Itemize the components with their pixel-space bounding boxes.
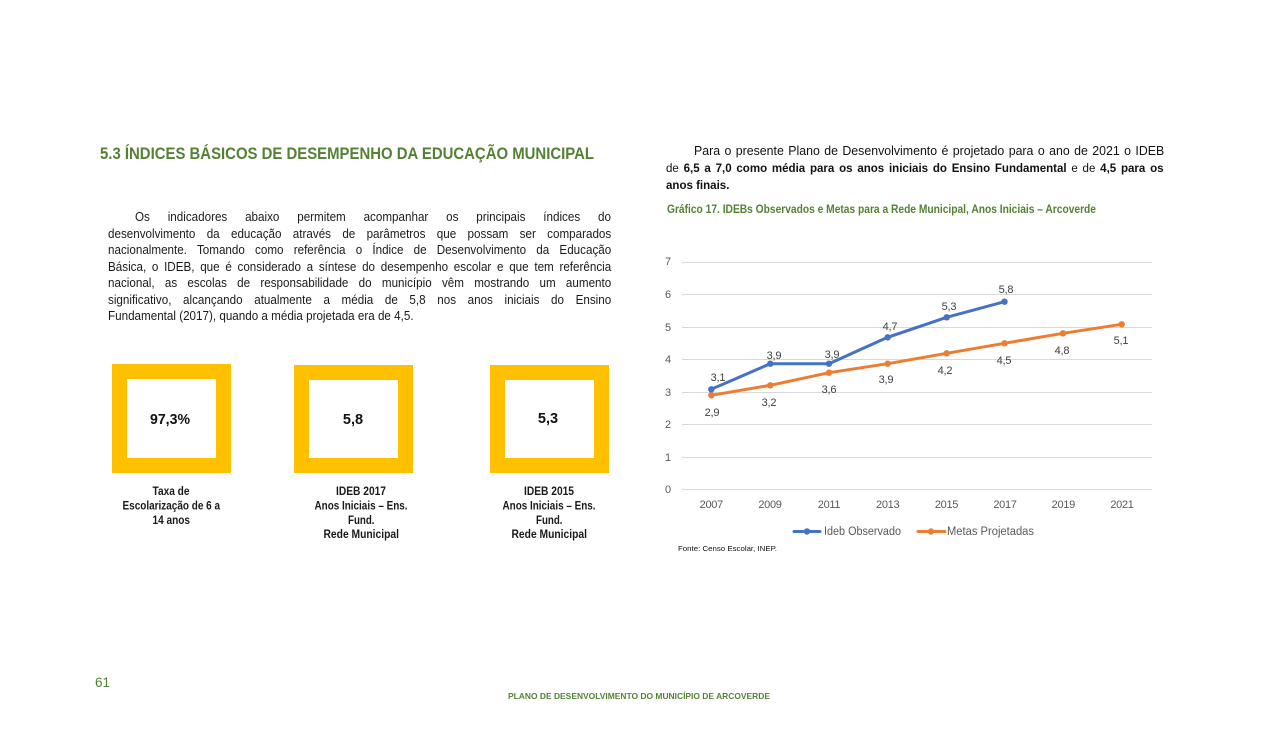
- yellow frame 2: [294, 365, 413, 473]
- caption: IDEB 2015: Rede Municipal: [512, 529, 587, 541]
- y axis labels: 6: [665, 289, 671, 301]
- data labels: ideb observado: 5,8: [999, 284, 1013, 296]
- series: metas projetadas: [708, 321, 1125, 398]
- data labels: metas projetadas: 4,5: [997, 355, 1011, 367]
- data labels: ideb observado: 3,1: [711, 372, 725, 384]
- caption: IDEB 2017: Anos Iniciais – Ens.: [314, 500, 408, 512]
- value 5,3: 5,3: [538, 411, 558, 427]
- panel: indicator IDEB 2017: [294, 365, 413, 541]
- y axis labels: 1: [665, 452, 671, 464]
- y axis labels: 4: [665, 354, 671, 366]
- y axis labels: [665, 256, 671, 496]
- data labels: ideb observado: [711, 284, 1013, 384]
- yellow frame 1: [112, 364, 231, 473]
- y axis labels: 5: [665, 322, 671, 334]
- caption: taxa de escolarização: Escolarização de 6 a: [122, 500, 221, 512]
- panel: indicator IDEB 2015: [490, 365, 609, 541]
- x axis labels: 2015: [935, 499, 958, 511]
- x axis labels: 2011: [818, 499, 840, 511]
- legend: Metas Projetadas: [947, 526, 1034, 538]
- data labels: ideb observado: 3,9: [767, 350, 781, 362]
- x axis labels: 2019: [1052, 499, 1075, 511]
- title: section heading: 5.3 ÍNDICES BÁSICOS DE DESEMPENHO DA EDUCAÇÃO MUNICIPAL: [100, 143, 594, 163]
- caption: IDEB 2015: IDEB 2015: [524, 486, 575, 498]
- y axis labels: 7: [665, 256, 671, 268]
- text block: introductory paragraph: Fundamental (2017), quando a média projetada era de 4,5.: [108, 308, 414, 323]
- caption: IDEB 2017: Fund.: [348, 515, 374, 527]
- caption: taxa de escolarização: [122, 486, 221, 527]
- line chart: Ideb observado e metas projetadas: [665, 256, 1152, 538]
- text block: introductory paragraph: [108, 209, 612, 323]
- data labels: metas projetadas: 5,1: [1114, 335, 1128, 347]
- caption: IDEB 2017: Rede Municipal: [324, 529, 399, 541]
- value 97,3%: 97,3%: [150, 412, 190, 428]
- panel: indicator 97,3%: [112, 364, 231, 527]
- caption: IDEB 2015: [502, 486, 596, 541]
- data labels: ideb observado: 5,3: [942, 301, 956, 313]
- data labels: metas projetadas: 3,9: [879, 374, 893, 386]
- x axis labels: 2017: [993, 499, 1017, 511]
- text block: introductory paragraph: nacionalmente. Tomando como referência o Índice de Desenvolvimento da Educação: [108, 242, 611, 257]
- yellow frame 3: [490, 365, 609, 473]
- data labels: metas projetadas: 4,8: [1055, 345, 1069, 357]
- legend: [794, 526, 1034, 538]
- y axis labels: 2: [665, 419, 671, 431]
- y axis labels: 0: [665, 484, 671, 496]
- caption: IDEB 2015: Anos Iniciais – Ens.: [502, 500, 596, 512]
- data labels: metas projetadas: [705, 335, 1128, 419]
- text block: projection paragraph: Para o presente Plano de Desenvolvimento é projetado para o ano de 2021 o IDEB: [694, 143, 1164, 158]
- x axis labels: [700, 499, 1134, 511]
- caption: IDEB 2017: IDEB 2017: [336, 486, 386, 498]
- series: ideb observado: [708, 298, 1008, 392]
- footer: PLANO DE DESENVOLVIMENTO DO MUNICÍPIO DE ARCOVERDE: [508, 691, 770, 701]
- legend: Ideb Observado: [824, 526, 901, 538]
- data labels: metas projetadas: 3,2: [762, 397, 776, 409]
- text block: introductory paragraph: nacional, as escolas de responsabilidade do município vêm mostrando um aumento: [108, 275, 611, 290]
- x axis labels: 2009: [758, 499, 782, 511]
- data labels: ideb observado: 3,9: [825, 349, 839, 361]
- caption: IDEB 2017: [314, 486, 408, 541]
- data labels: metas projetadas: 4,2: [938, 365, 952, 377]
- data labels: metas projetadas: 2,9: [705, 407, 719, 419]
- text block: introductory paragraph: Básica, o IDEB, que é considerado a síntese do desempenho escolar e que tem referência: [108, 258, 611, 274]
- caption: taxa de escolarização: Taxa de: [152, 486, 190, 498]
- source note: Fonte: Censo Escolar, INEP.: [678, 544, 777, 553]
- value 5,8: 5,8: [343, 412, 363, 428]
- page number: 61: [95, 674, 110, 690]
- x axis labels: 2021: [1110, 499, 1134, 511]
- data labels: ideb observado: 4,7: [883, 321, 897, 333]
- text block: projection paragraph: anos finais.: [666, 178, 729, 192]
- x axis labels: 2013: [876, 499, 900, 511]
- caption: IDEB 2015: Fund.: [536, 515, 562, 527]
- chart title: Gráfico 17. IDEBs Observados e Metas para a Rede Municipal, Anos Iniciais – Arcoverde: [667, 204, 1096, 216]
- x axis labels: 2007: [700, 499, 723, 511]
- text block: introductory paragraph: desenvolvimento da educação através de parâmetros que possam ser comparados: [108, 226, 611, 240]
- caption: taxa de escolarização: 14 anos: [152, 515, 190, 527]
- text block: projection paragraph: de 6,5 a 7,0 como média para os anos iniciais do Ensino Fundamental e de 4,5 para os: [666, 161, 1164, 175]
- text block: projection paragraph: [666, 143, 1164, 192]
- y axis labels: 3: [665, 387, 671, 399]
- text block: introductory paragraph: Os indicadores abaixo permitem acompanhar os principais índices do: [135, 209, 611, 224]
- data labels: metas projetadas: 3,6: [822, 384, 836, 396]
- text block: introductory paragraph: significativo, alcançando atualmente a média de 5,8 nos anos iniciais do Ensino: [108, 292, 611, 306]
